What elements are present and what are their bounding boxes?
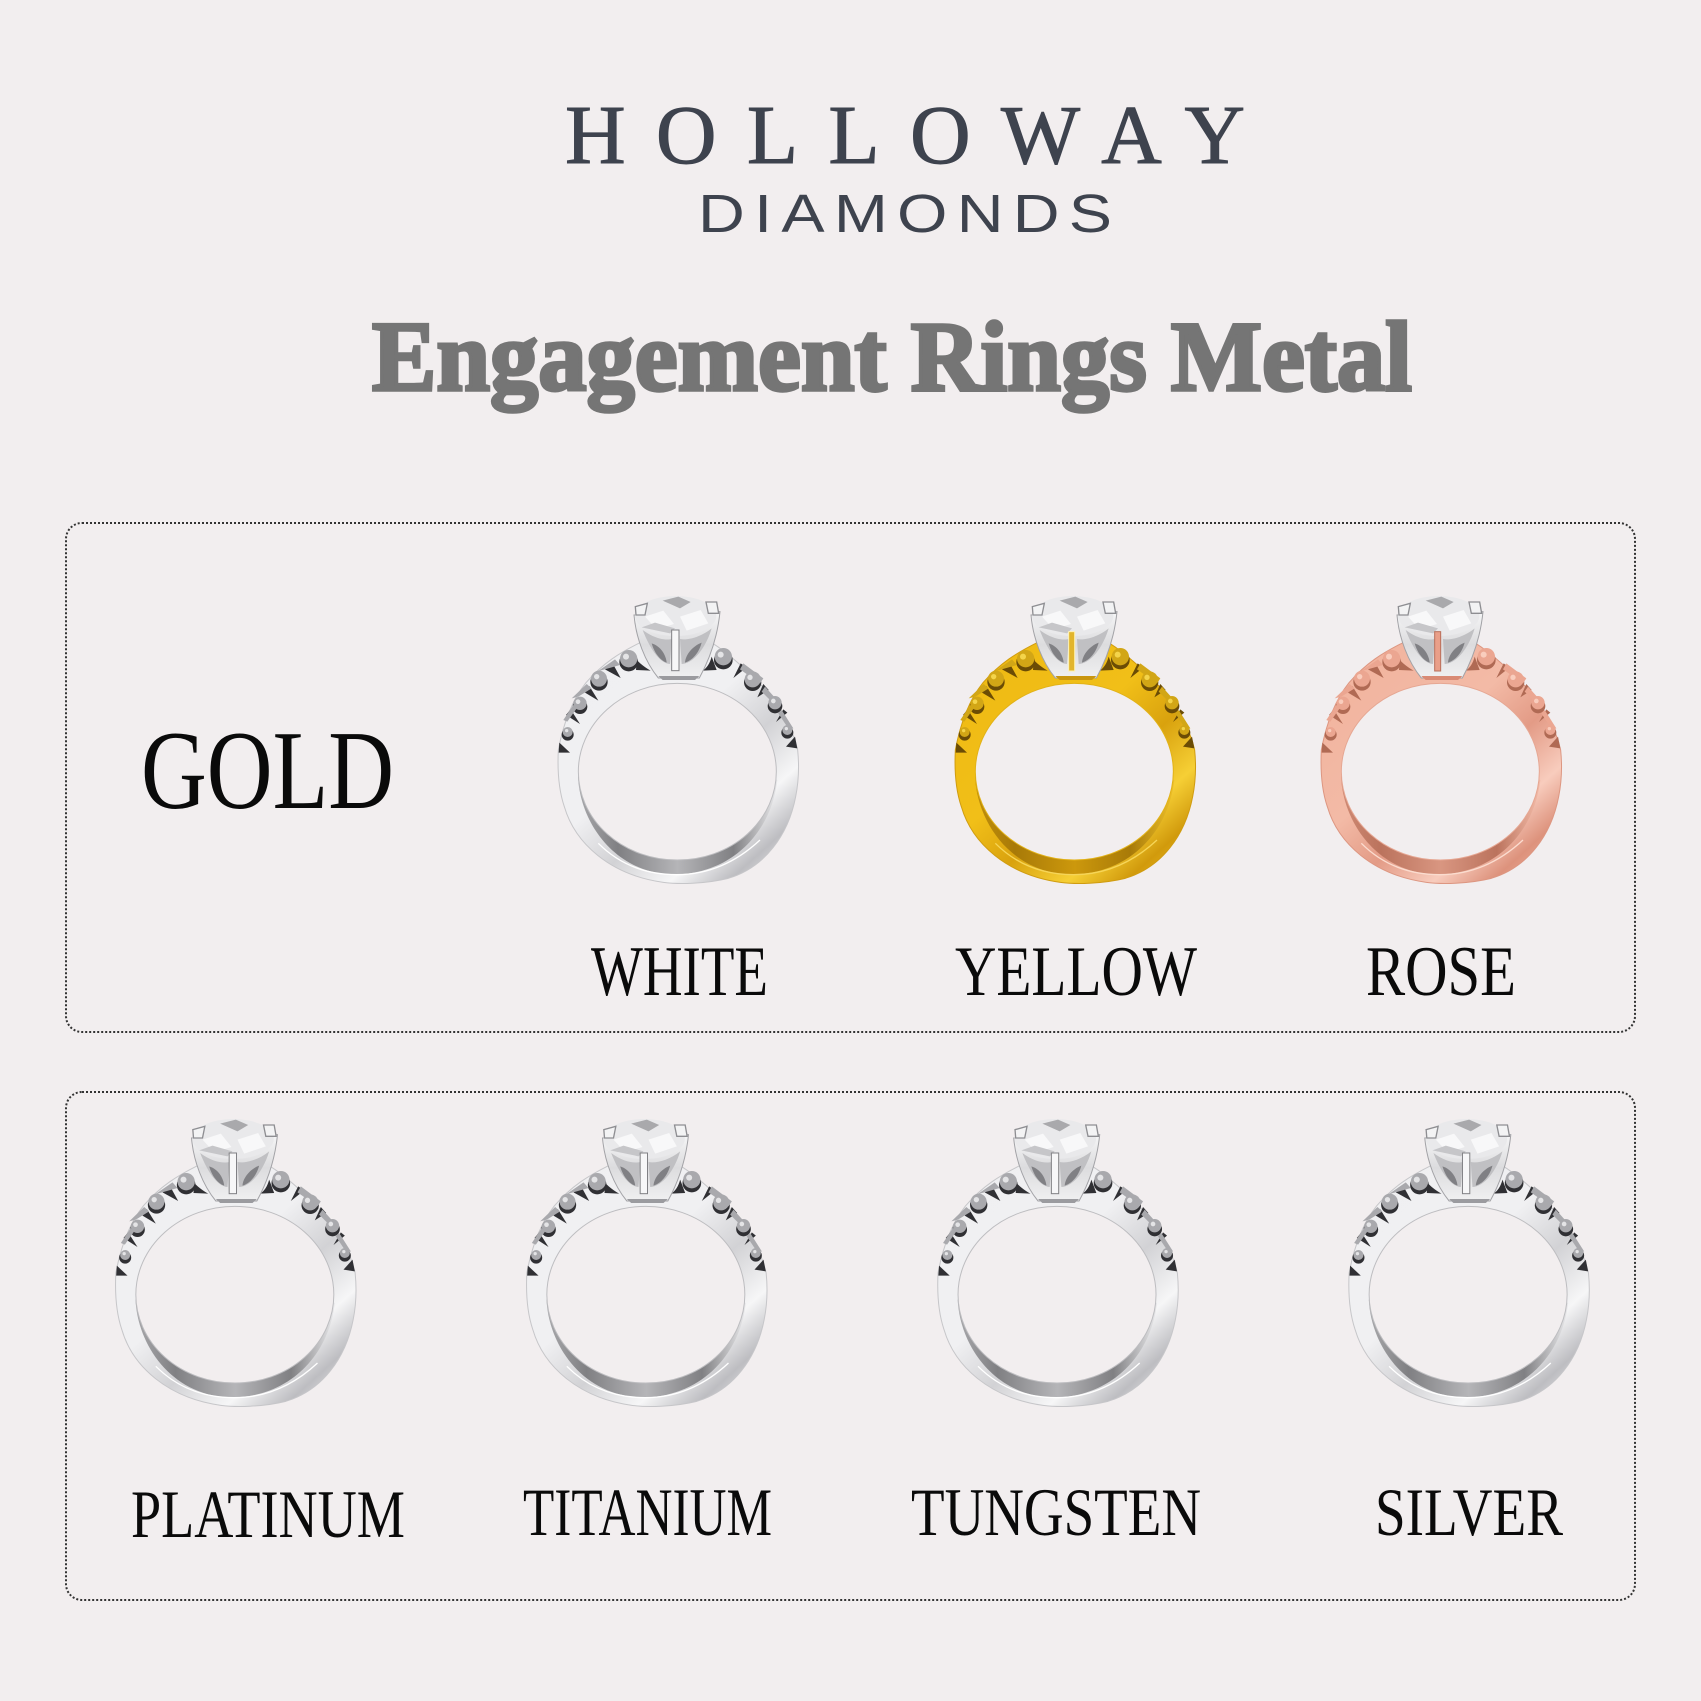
ring: titanium bbox=[527, 1119, 767, 1406]
panel: other metals bbox=[66, 1092, 1635, 1600]
label: titanium: TITANIUM bbox=[523, 1474, 772, 1550]
heading: gold: GOLD bbox=[141, 709, 394, 833]
label: platinum: PLATINUM bbox=[131, 1476, 405, 1552]
panel: gold bbox=[66, 523, 1635, 1032]
panel border: gold bbox=[66, 523, 1635, 1032]
title: Engagement Rings Metal bbox=[372, 301, 1412, 412]
ring: tungsten bbox=[938, 1119, 1178, 1406]
panel border: other metals bbox=[66, 1092, 1635, 1600]
label: rose: ROSE bbox=[1366, 933, 1516, 1011]
label: tungsten: TUNGSTEN bbox=[911, 1474, 1201, 1550]
label: yellow: YELLOW bbox=[955, 933, 1197, 1011]
ring: white gold bbox=[558, 596, 798, 883]
ring: silver bbox=[1349, 1119, 1589, 1406]
ring: rose gold bbox=[1321, 596, 1561, 883]
ring: yellow gold bbox=[955, 596, 1195, 883]
label: white: WHITE bbox=[591, 933, 768, 1011]
logo wordmark: Diamonds: DIAMONDS bbox=[698, 183, 1112, 244]
logo wordmark: Holloway: HOLLOWAY bbox=[565, 89, 1245, 182]
ring: platinum bbox=[116, 1119, 356, 1406]
label: silver: SILVER bbox=[1375, 1474, 1564, 1550]
